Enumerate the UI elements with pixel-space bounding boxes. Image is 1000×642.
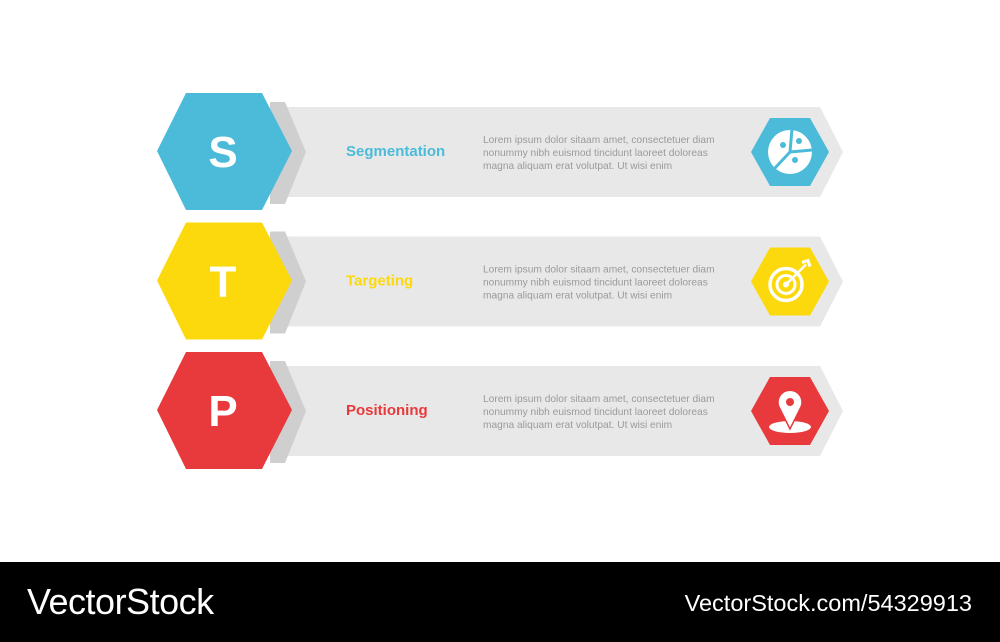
icon: map pin [751, 377, 829, 445]
icon: target [751, 248, 829, 316]
hex shadow [270, 361, 306, 463]
footer url: VectorStock.com/54329913 [685, 590, 972, 616]
heading: Positioning [346, 402, 428, 419]
icon: pie chart [751, 118, 829, 186]
body text: nonummy nibh euismod tincidunt laoreet doloreas [483, 148, 708, 159]
letter hex S: S [208, 128, 238, 177]
hex shadow [270, 102, 306, 204]
row: Targeting [157, 222, 843, 340]
body text: Lorem ipsum dolor sitaam amet, consectetuer diam [483, 394, 715, 405]
band [270, 366, 843, 456]
body text: magna aliquam erat volutpat. Ut wisi enim [483, 161, 672, 172]
band [270, 236, 843, 326]
letter hex P [157, 352, 292, 469]
body text: Lorem ipsum dolor sitaam amet, consectetuer diam [483, 135, 715, 146]
body text: magna aliquam erat volutpat. Ut wisi enim [483, 290, 672, 302]
body text: Lorem ipsum dolor sitaam amet, consectetuer diam [483, 264, 715, 276]
heading: Targeting [346, 272, 413, 290]
body text: nonummy nibh euismod tincidunt laoreet doloreas [483, 407, 708, 418]
body text: nonummy nibh euismod tincidunt laoreet doloreas [483, 278, 708, 288]
row: Segmentation [157, 93, 843, 210]
body text: magna aliquam erat volutpat. Ut wisi enim [483, 420, 672, 431]
hex shadow [270, 232, 306, 334]
letter hex T: T [210, 258, 237, 306]
band [270, 107, 843, 197]
footer logo: VectorStock [27, 581, 214, 622]
heading: Segmentation [346, 143, 445, 160]
letter hex P: P [208, 387, 238, 436]
letter hex T [157, 222, 292, 340]
footer bar [0, 562, 1000, 642]
row: Positioning [157, 352, 843, 469]
letter hex S [157, 93, 292, 210]
